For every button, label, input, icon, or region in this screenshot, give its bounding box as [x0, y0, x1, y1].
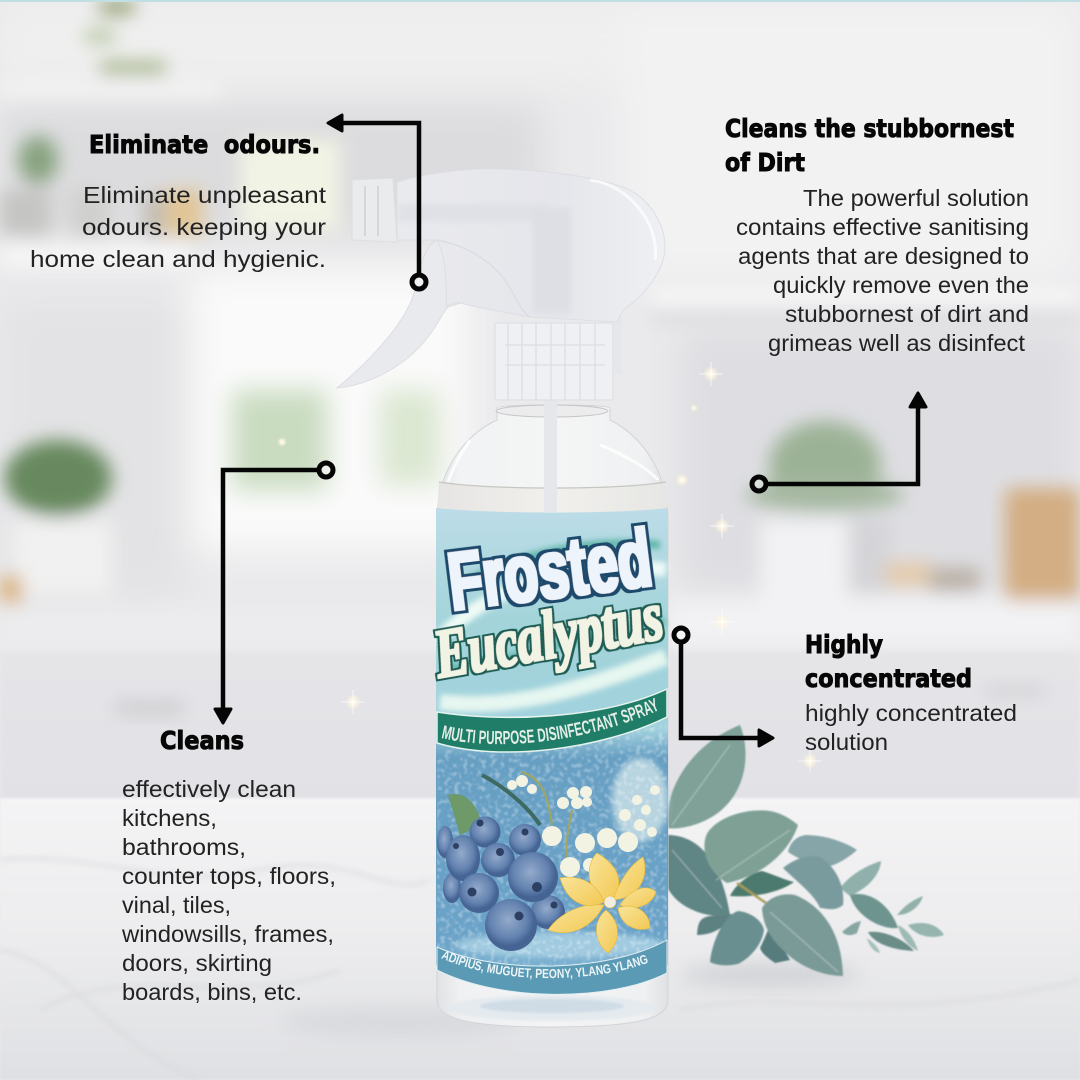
bottom base: [448, 995, 656, 1021]
body text: concentrated solution: [805, 700, 1017, 755]
heading: cleans: Cleans: [160, 726, 244, 755]
sparkles: [277, 362, 822, 773]
body text: surfaces list: [121, 776, 336, 1005]
connector arrow: stubborn dirt: [752, 393, 926, 491]
shelves: [0, 82, 220, 96]
body text: powerful solution: contains effective sanitising: [736, 214, 1029, 240]
body text: concentrated solution: solution: [805, 729, 888, 755]
body text: surfaces list: bathrooms,: [122, 834, 246, 860]
connector arrow: concentrated: [674, 628, 773, 746]
spray head: [397, 169, 665, 322]
body text: powerful solution: grimeas well as disinfect: [768, 330, 1026, 356]
callout: cleans the stubbornest of dirt: [725, 114, 1029, 491]
heading: highly concentrated: Highly: [805, 630, 883, 659]
wooden board: [1005, 488, 1080, 602]
label frost speckle: [437, 725, 667, 967]
body text: surfaces list: vinal, tiles,: [122, 892, 231, 918]
callout: eliminate odours: [30, 115, 426, 289]
connector arrow: odours: [328, 115, 426, 289]
jars: [885, 562, 930, 586]
leaf stems and veins: [672, 745, 838, 972]
illustration: leaf and lily flowers: [448, 772, 660, 877]
label title: Eucalyptus: Eucalyptus: [428, 578, 668, 694]
connector arrow: cleans: [215, 463, 333, 723]
body text: surfaces list: windowsills, frames,: [121, 921, 334, 947]
trigger: [337, 240, 470, 388]
heading: cleans the stubbornest of dirt: [725, 114, 1014, 177]
heading: highly concentrated: [805, 630, 972, 693]
body text: concentrated solution: highly concentrated: [805, 700, 1017, 726]
body text: powerful solution: stubbornest of dirt and: [785, 301, 1029, 327]
greenery on top shelf: [100, 0, 134, 14]
label banner: MULTI PURPOSE DISINFECTANT SPRAY: [442, 698, 658, 744]
body text: surfaces list: doors, skirting: [122, 950, 272, 976]
body text: powerful solution: The powerful solution: [803, 185, 1029, 211]
product label: [428, 508, 672, 994]
body text: powerful solution: quickly remove even the: [773, 272, 1029, 298]
marble table: [0, 798, 1080, 1080]
heading: highly concentrated: concentrated: [805, 664, 972, 693]
callout: highly concentrated: [674, 628, 1017, 755]
label footer band: [436, 939, 668, 994]
body text: powerful solution: [736, 185, 1029, 356]
bottle glass body: [437, 400, 668, 1027]
label footer band: ADIPIUS, MUGUET, PEONY, YLANG YLANG: [441, 951, 648, 980]
label title: Frosted: Frosted: [443, 513, 657, 628]
heading: cleans the stubbornest of dirt: Cleans the stubbornest: [725, 114, 1014, 143]
body text: eliminate odours: Eliminate unpleasant: [83, 182, 327, 208]
nozzle: [352, 178, 397, 242]
body text: surfaces list: effectively clean: [122, 776, 296, 802]
illustration: yellow flower: [548, 853, 656, 953]
body text: eliminate odours: odours. keeping your: [82, 214, 326, 240]
eucalyptus leaves: [665, 725, 944, 976]
right plant: [769, 421, 881, 509]
spray cap collar: [495, 316, 622, 400]
illustration: blueberries: [437, 816, 565, 951]
heading: cleans the stubbornest of dirt: of Dirt: [725, 148, 805, 177]
body text: eliminate odours: home clean and hygienic.: [30, 246, 326, 272]
callout: cleans: [121, 463, 336, 1005]
body text: powerful solution: agents that are designed to: [738, 243, 1029, 269]
window greens: [232, 390, 440, 490]
product: spray bottle: [334, 128, 690, 1028]
body text: surfaces list: counter tops, floors,: [122, 863, 336, 889]
shelf objects: [0, 190, 50, 235]
body text: surfaces list: boards, bins, etc.: [122, 979, 302, 1005]
heading: eliminate odours: Eliminate odours.: [89, 130, 320, 159]
counter: [0, 610, 440, 646]
left plant: [4, 440, 112, 516]
body text: surfaces list: kitchens,: [122, 805, 217, 831]
body text: eliminate odours: [30, 182, 327, 272]
